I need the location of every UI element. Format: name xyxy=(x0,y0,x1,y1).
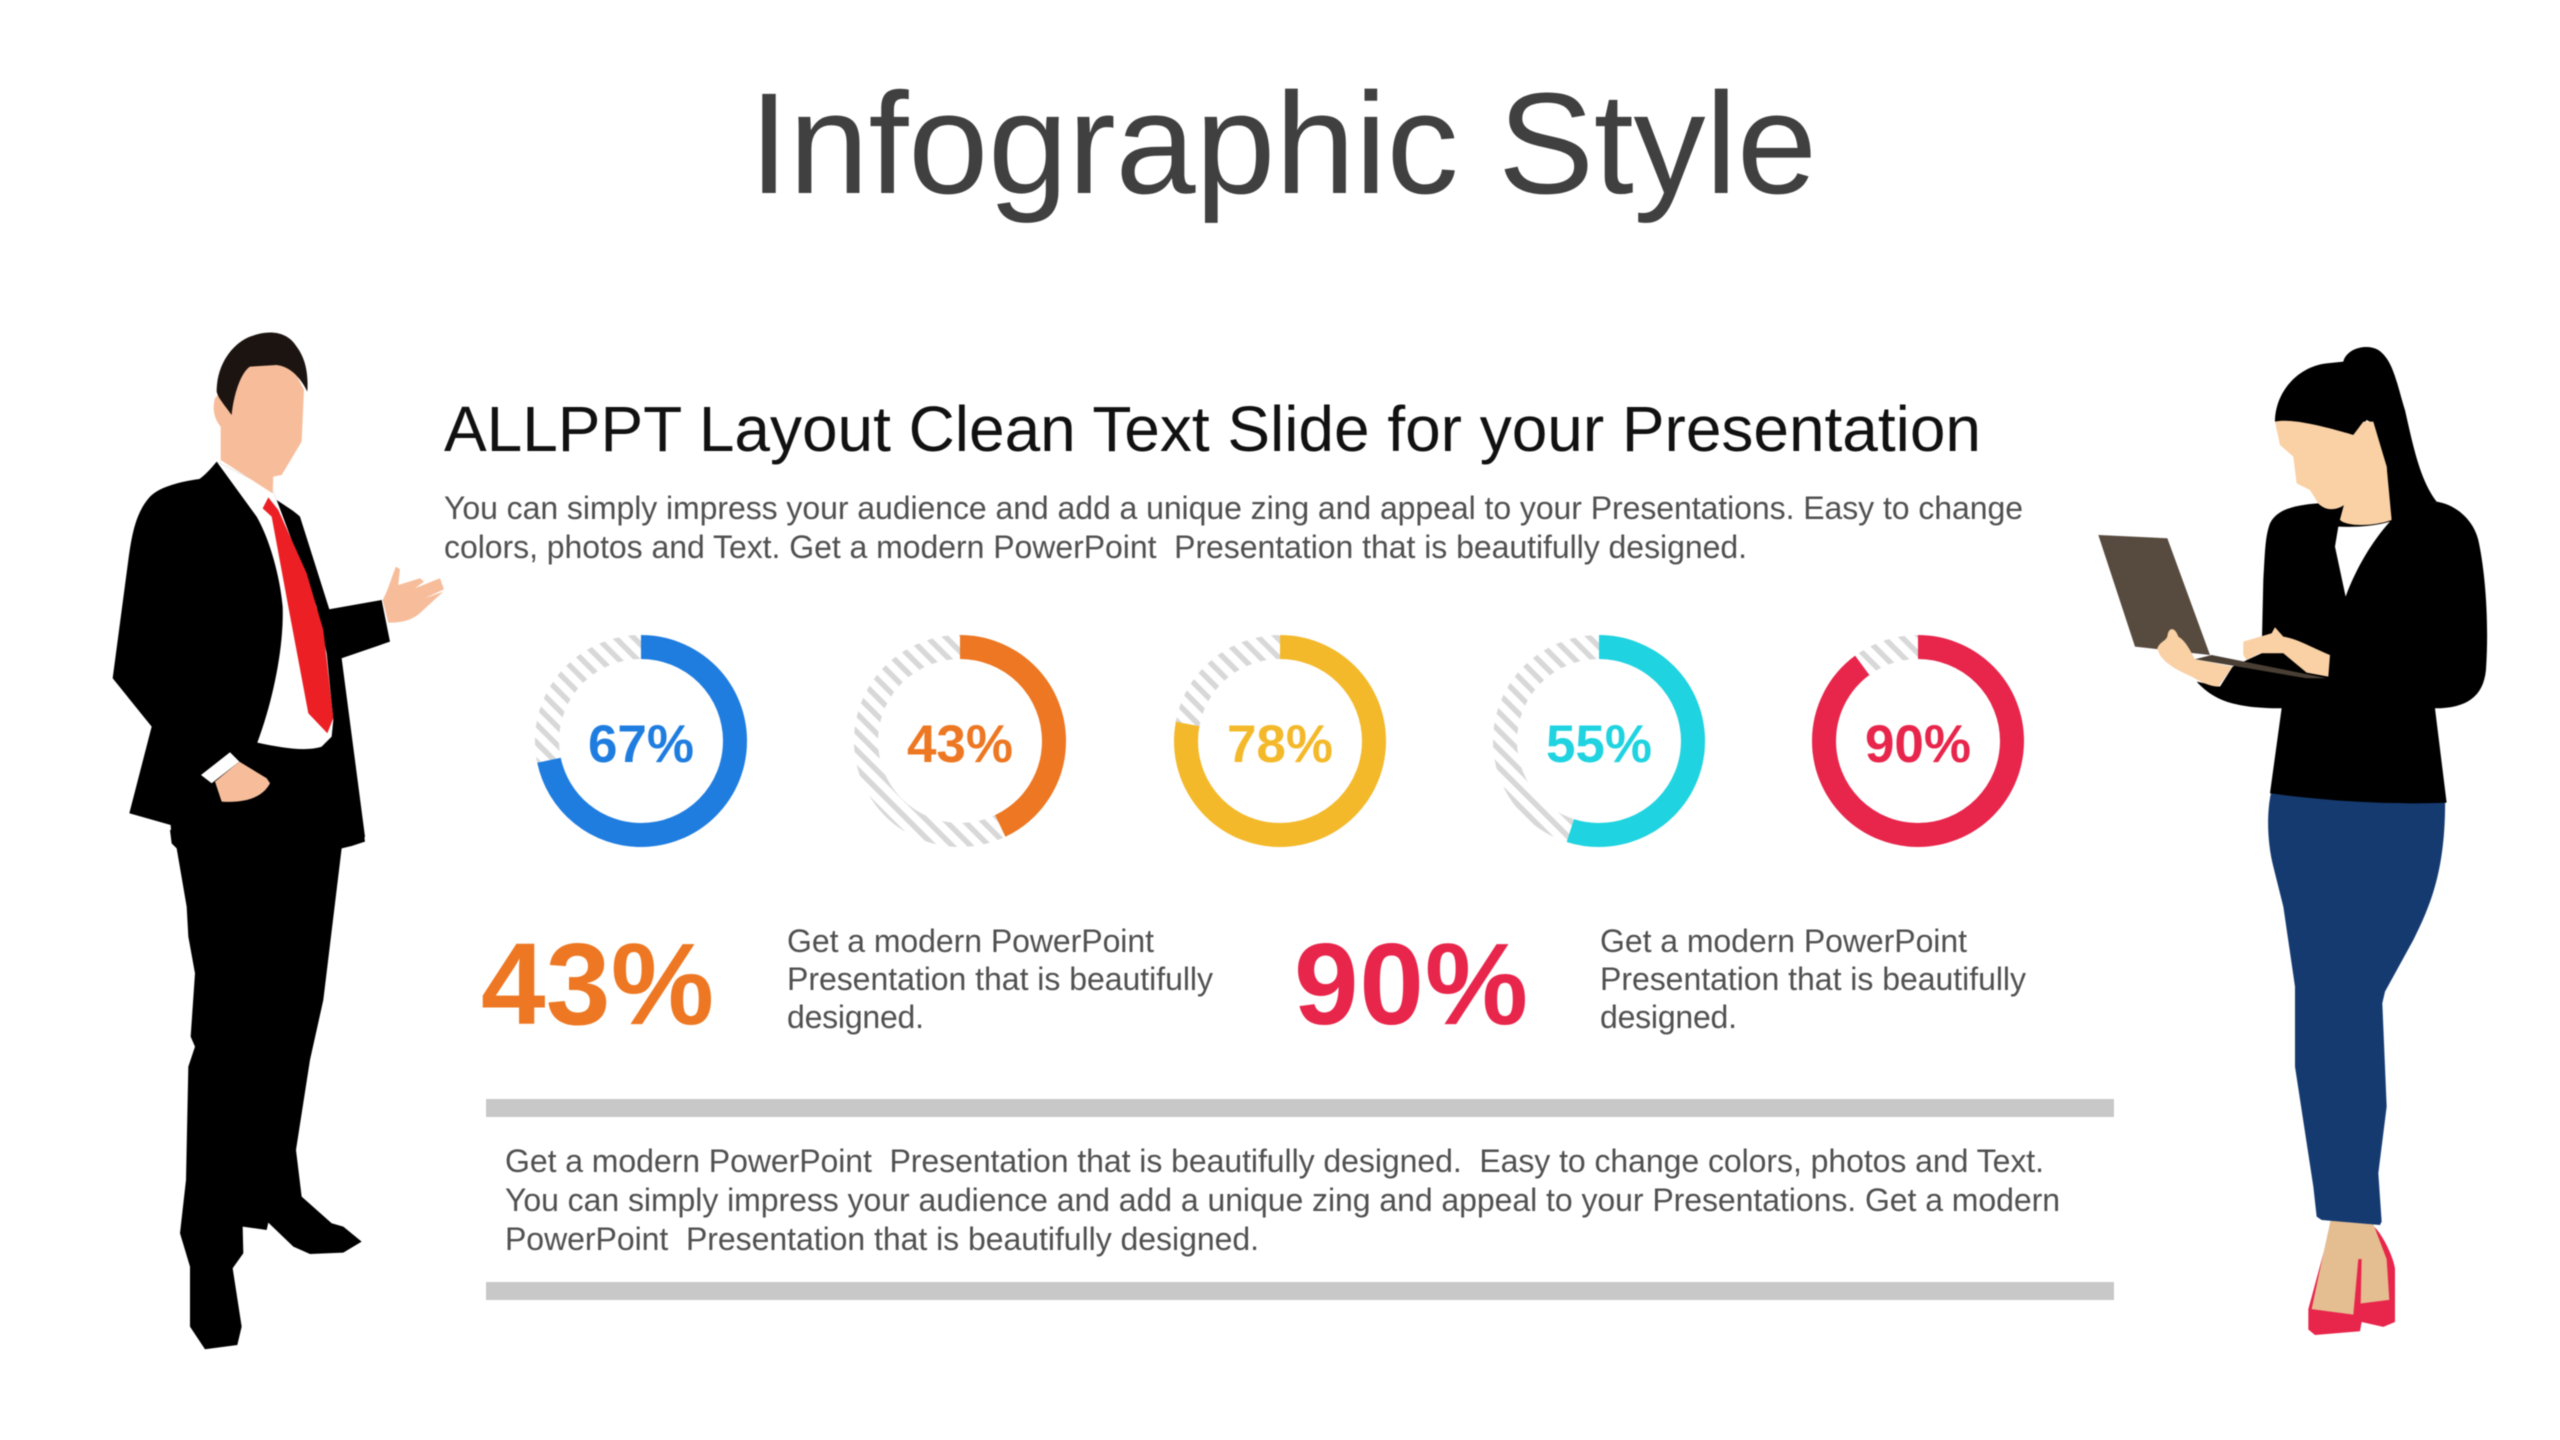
woman legs xyxy=(2312,1220,2389,1315)
holding hand xyxy=(2157,629,2233,687)
bottom paragraph: You can simply impress your audience and add a unique zing and appeal to your Presentations. Get a modern xyxy=(505,1182,2060,1218)
laptop base xyxy=(2195,655,2327,678)
donut chart: 78% xyxy=(1186,647,1374,835)
donut chart: 43% xyxy=(866,647,1054,835)
stat text: 90%: Presentation that is beautifully xyxy=(1600,961,2026,997)
hair xyxy=(217,333,308,415)
intro text xyxy=(444,490,2023,565)
donut chart: 67%: 67% xyxy=(588,715,694,774)
pocket hand xyxy=(215,762,270,802)
face and neck xyxy=(2275,421,2392,525)
shirt xyxy=(217,462,333,749)
stat text: 90%: Get a modern PowerPoint xyxy=(1600,923,1967,959)
head and neck xyxy=(214,362,304,493)
man legs and shoes xyxy=(170,830,365,1349)
donut chart: 55%: 55% xyxy=(1546,715,1652,774)
bottom divider bar xyxy=(486,1282,2114,1300)
woman upper body xyxy=(2098,347,2487,803)
donut chart: 55% xyxy=(1505,647,1693,835)
illustration: woman with laptop xyxy=(2098,347,2487,1335)
donut chart: 90% xyxy=(1824,647,2012,835)
blouse xyxy=(2335,522,2390,597)
stat text: 90%: designed. xyxy=(1600,999,1737,1035)
stat text: 90% xyxy=(1600,923,2026,1035)
title: Infographic Style xyxy=(749,63,1817,224)
tie xyxy=(263,497,333,733)
illustration: businessman presenting xyxy=(113,333,444,1349)
woman trousers xyxy=(2268,790,2445,1225)
intro text: You can simply impress your audience and add a unique zing and appeal to your Presentations. Easy to change xyxy=(444,490,2023,526)
donut chart: 78%: 78% xyxy=(1227,715,1333,774)
woman shoes xyxy=(2308,1224,2395,1335)
ponytail and hair xyxy=(2275,347,2437,522)
donut chart: 43%: 43% xyxy=(907,715,1013,774)
donut chart: 90%: 90% xyxy=(1865,715,1971,774)
shirt cuff xyxy=(201,752,239,783)
stat: 90% big number: 90% xyxy=(1294,919,1528,1049)
bottom paragraph xyxy=(505,1143,2060,1257)
raised hand xyxy=(383,567,444,623)
stat text: 43% xyxy=(787,923,1213,1035)
blazer xyxy=(2197,502,2487,803)
top divider bar xyxy=(486,1099,2114,1117)
donut chart: 67% xyxy=(547,647,735,835)
bottom paragraph: Get a modern PowerPoint Presentation that is beautifully designed. Easy to change colors, photos and Text. xyxy=(505,1143,2044,1179)
jacket xyxy=(113,462,390,840)
stat: 43% big number: 43% xyxy=(481,919,714,1049)
bottom paragraph: PowerPoint Presentation that is beautifully designed. xyxy=(505,1221,1259,1257)
intro text: colors, photos and Text. Get a modern PowerPoint Presentation that is beautifully designed. xyxy=(444,529,1747,565)
stat text: 43%: designed. xyxy=(787,999,924,1035)
heading: ALLPPT Layout Clean Text Slide for your Presentation xyxy=(444,393,1981,465)
stat text: 43%: Get a modern PowerPoint xyxy=(787,923,1154,959)
laptop screen xyxy=(2098,535,2210,655)
typing hand xyxy=(2243,627,2330,677)
man upper body xyxy=(113,333,444,840)
stat text: 43%: Presentation that is beautifully xyxy=(787,961,1213,997)
